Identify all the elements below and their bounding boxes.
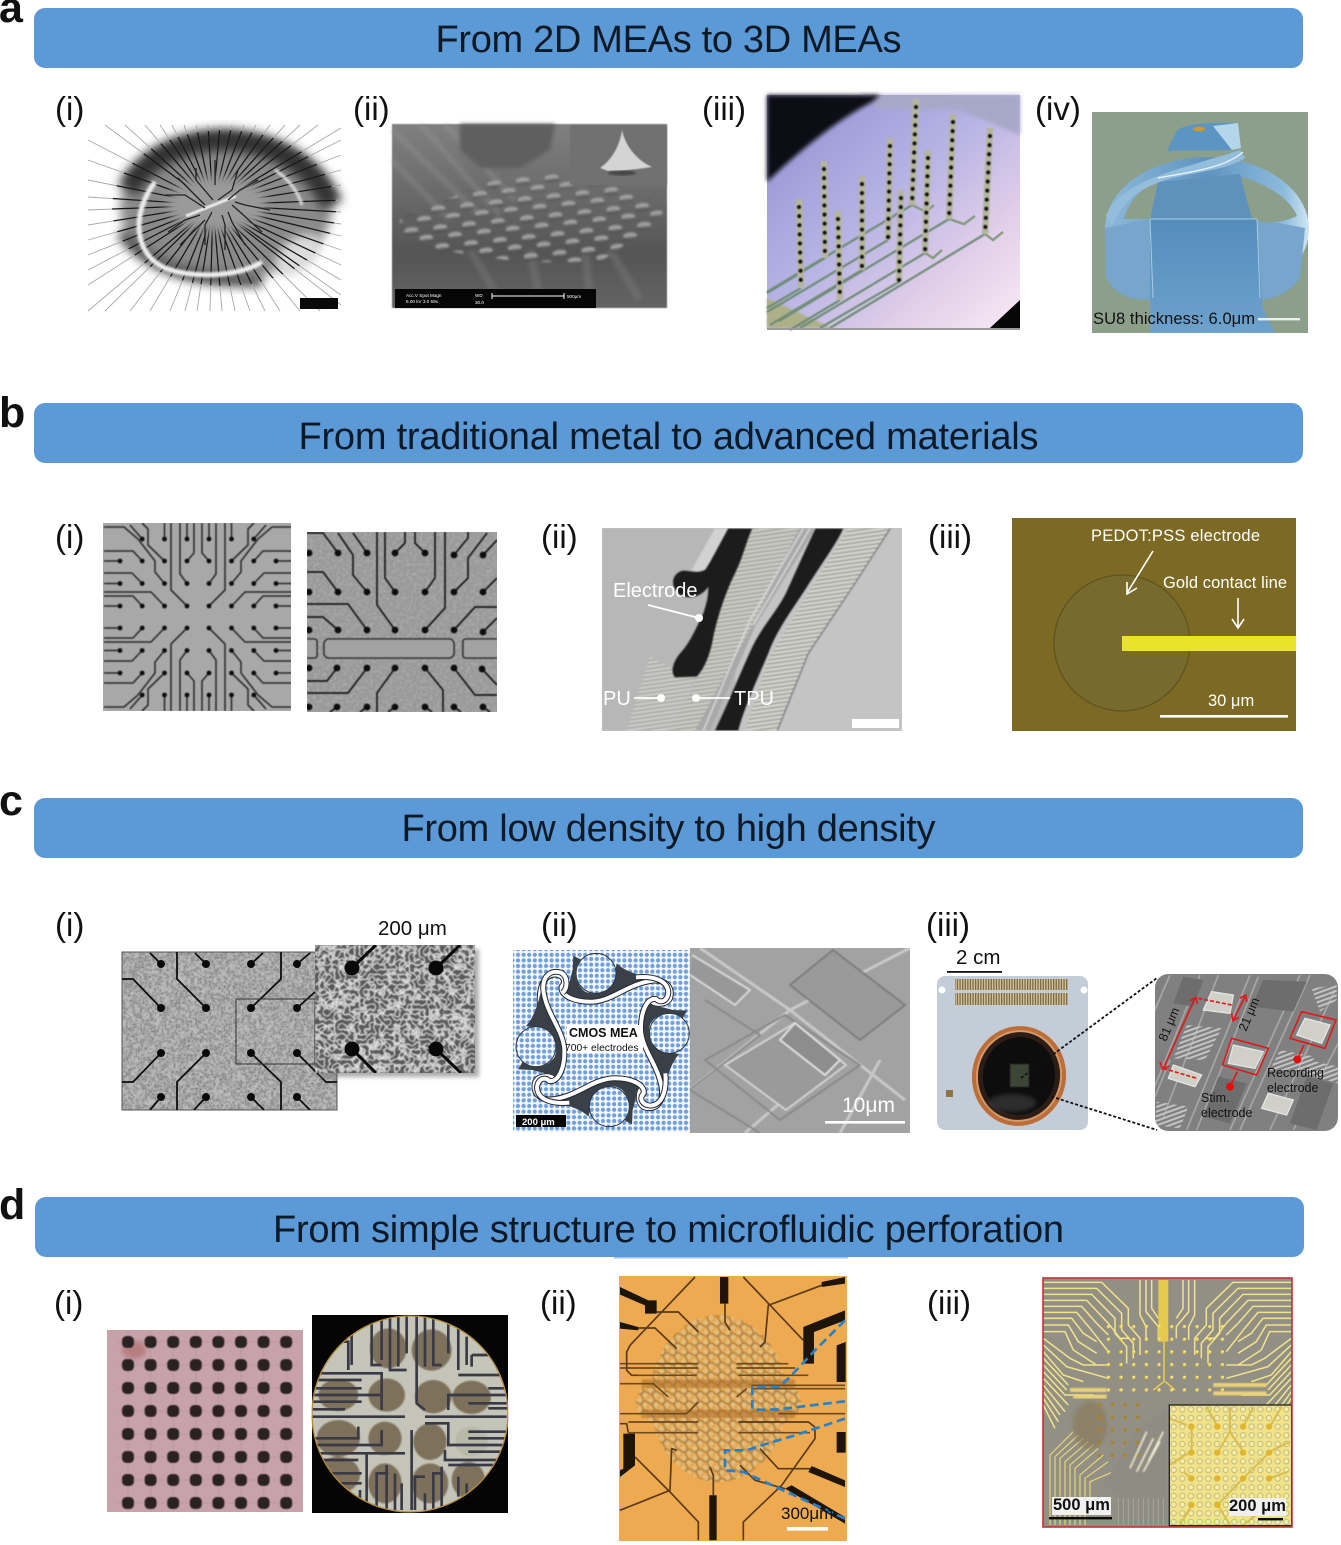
label a(ii): (ii) [353,90,390,127]
image: d(ii) perforated MEA with microfluidic channels: 300μm [781,1504,833,1523]
label a(i): (i) [55,90,84,127]
label c(i): (i) [55,906,84,943]
image: a(i) radial 2D MEA on tissue slice [88,125,341,311]
image: d(i) electrode grid on pink tissue [107,1315,508,1513]
image: b(ii) stretchable electrode micrograph: TPU [734,688,774,710]
label a(iv): (iv) [1035,90,1081,127]
image: a(iv) SU8 ribbon electrode [1092,112,1309,333]
image: a(iv) SU8 ribbon electrode: SU8 thickness: 6.0μm [1093,310,1255,328]
image: d(iii) gold traces on MEA with inset [1043,1278,1292,1527]
scale label: 200 µm: 200 μm [378,917,447,940]
image: c(ii) CMOS MEA with swirl neural pattern: 10μm [842,1094,895,1117]
label d(i): (i) [54,1284,83,1321]
label b(iii): (iii) [928,518,972,555]
section header: From 2D MEAs to 3D MEAs: From 2D MEAs to 3D MEAs [436,19,902,61]
image: b(iii) PEDOT:PSS electrode: Gold contact line [1163,574,1287,592]
image: c(iii) zoomed electrode inset [1143,974,1341,1131]
label d(ii): (ii) [540,1284,577,1321]
section header: From low density to high density [34,798,1303,858]
image: c(iii) zoomed electrode inset: Recording [1267,1066,1324,1080]
image: b(ii) stretchable electrode micrograph: PU [603,688,631,710]
image: c(ii) CMOS MEA with swirl neural pattern: CMOS MEA [569,1026,638,1040]
section header: From traditional metal to advanced materials: From traditional metal to advanced materials [298,416,1038,458]
image: a(ii) SEM of 3D electrode array: WD [475,293,483,298]
image: a(iii) 3D pillar electrodes [767,95,1020,330]
image: a(ii) SEM of 3D electrode array: Acc.V Spot Magn [406,293,442,298]
label c(ii): (ii) [541,906,578,943]
scale label: 2 cm [947,946,1002,973]
label b(ii): (ii) [541,518,578,555]
image: c(ii) CMOS MEA with swirl neural pattern [513,948,910,1133]
label c(iii): (iii) [926,906,970,943]
label d(iii): (iii) [927,1284,971,1321]
label b(i): (i) [55,518,84,555]
image: c(ii) CMOS MEA with swirl neural pattern: 200 μm [522,1117,555,1128]
image: c(iii) zoomed electrode inset: electrode [1201,1106,1252,1120]
image: d(iii) gold traces on MEA with inset: 200 μm [1229,1497,1286,1515]
image: a(ii) SEM of 3D electrode array: 500μm [567,294,581,299]
section header: From low density to high density: From low density to high density [402,808,936,850]
image: a(ii) SEM of 3D electrode array: 30.0 [475,300,484,305]
image: c(ii) CMOS MEA with swirl neural pattern: 700+ electrodes [565,1043,639,1054]
image: b(ii) stretchable electrode micrograph: Electrode [613,580,698,602]
pillar bodies [799,99,990,300]
image: a(ii) SEM of 3D electrode array [392,124,667,308]
section header: From 2D MEAs to 3D MEAs [34,8,1303,68]
section header: From traditional metal to advanced materials [34,403,1303,463]
scale label: 2 cm: 2 cm [956,946,1000,969]
image: b(iii) PEDOT:PSS electrode: PEDOT:PSS electrode [1091,527,1260,545]
image: c(i) neurons on MEA with zoomed overlay [122,945,479,1110]
image: c(iii) zoomed electrode inset: 21 μm [1236,995,1262,1033]
section header: From simple structure to microfluidic perforation: From simple structure to microfluidic perforation [273,1209,1064,1251]
image: c(iii) zoomed electrode inset: electrode [1267,1081,1318,1095]
image: d(iii) gold traces on MEA with inset: 500 μm [1053,1496,1110,1514]
label a(iii): (iii) [702,90,746,127]
image: a(ii) SEM of 3D electrode array: 5.00 kV 3.0 59x [406,299,439,304]
image: d(ii) perforated MEA with microfluidic channels [619,1276,847,1541]
image: c(iii) zoomed electrode inset: 81 μm [1156,1005,1182,1043]
image: c(iii) zoomed electrode inset: Stim. [1201,1091,1229,1105]
image: b(i) pair of MEA chips with cells [103,523,497,712]
image: b(ii) stretchable electrode micrograph [602,528,902,731]
image: c(iii) CMOS chip board [937,976,1157,1133]
section header: From simple structure to microfluidic perforation [35,1197,1304,1257]
image: b(iii) PEDOT:PSS electrode: 30 μm [1208,692,1254,710]
image: b(iii) PEDOT:PSS electrode [1012,518,1296,731]
